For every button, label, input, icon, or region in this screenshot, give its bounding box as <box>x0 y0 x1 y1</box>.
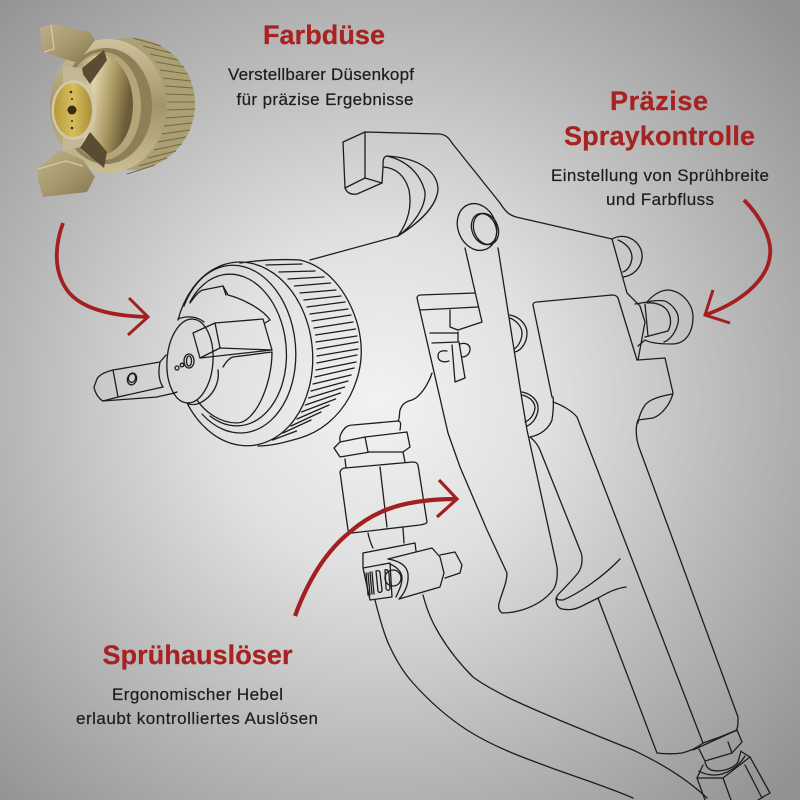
cone <box>67 55 133 155</box>
heading: Präzise Spraykontrolle: Präzise <box>610 86 708 116</box>
nozzle holes <box>68 91 76 129</box>
text: Farbdüse description: für präzise Ergebnisse <box>236 90 414 109</box>
hose clamp <box>363 528 462 600</box>
arrow: to trigger <box>295 480 457 616</box>
text: Spraykontrolle description: und Farbfluss <box>606 190 714 209</box>
panel and grip <box>530 295 737 754</box>
body bolts on lever <box>510 315 538 426</box>
text: Farbdüse description: Verstellbarer Düsenkopf <box>228 65 414 84</box>
barrel end fittings <box>693 730 770 800</box>
text: Spraykontrolle description: Einstellung von Sprühbreite <box>551 166 769 185</box>
heading: Farbdüse: Farbdüse <box>263 20 385 50</box>
gold face plate <box>52 80 96 140</box>
knurled ring <box>65 38 195 170</box>
front ring <box>50 39 166 173</box>
heading: Sprühauslöser: Sprühauslöser <box>102 640 293 670</box>
text: Spraykontrolle description <box>551 166 769 209</box>
text: Sprühauslöser description <box>76 685 318 728</box>
arrow: to nozzle head <box>57 223 148 335</box>
text: Sprühauslöser description: erlaubt kontrolliertes Auslösen <box>76 709 318 728</box>
text: Farbdüse description <box>228 65 414 109</box>
text: Sprühauslöser description: Ergonomischer Hebel <box>112 685 283 704</box>
gun body upper outline and hook <box>310 132 612 260</box>
upper wing <box>40 24 95 63</box>
rear body edge and air valve <box>612 236 738 731</box>
heading: Präzise Spraykontrolle <box>564 86 755 151</box>
knurl ridges <box>266 264 358 440</box>
dark recess between wings <box>80 50 107 168</box>
wing upper <box>190 286 270 323</box>
photo: brass nozzle head <box>38 24 195 197</box>
wing lower <box>94 355 177 401</box>
spray gun line drawing <box>94 132 770 800</box>
face disc <box>164 317 216 405</box>
wing on face <box>193 319 272 358</box>
air cap with knurled ring <box>94 260 361 446</box>
nozzle holes <box>184 354 194 368</box>
lower wing <box>38 150 95 197</box>
heading: Präzise Spraykontrolle: Spraykontrolle <box>564 121 755 151</box>
hex nuts at paint inlet <box>334 421 427 533</box>
arrow: to spray control knob <box>705 200 770 323</box>
lever with pivot pin <box>417 198 557 613</box>
fluid hose <box>375 595 707 798</box>
neck to air cap <box>398 373 432 421</box>
center mount <box>63 66 84 152</box>
